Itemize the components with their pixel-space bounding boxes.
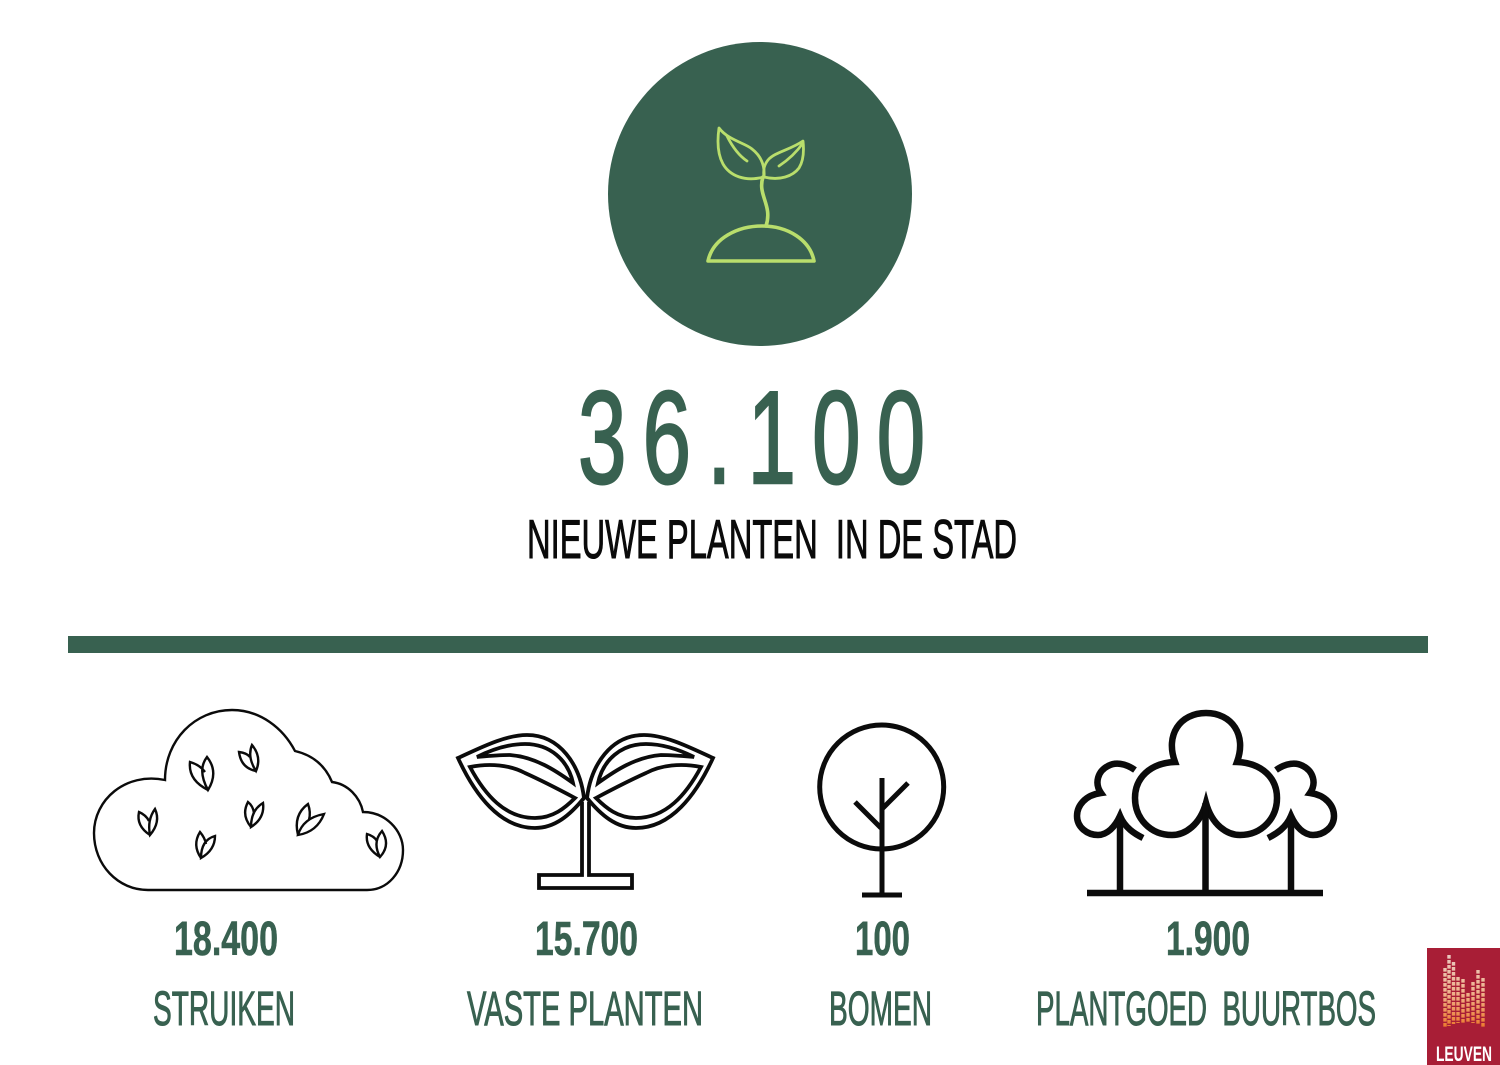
main number: 36.100 bbox=[578, 364, 925, 511]
item: bomen bbox=[820, 725, 944, 1036]
label: BOMEN bbox=[829, 983, 932, 1036]
icon: bush bbox=[94, 710, 403, 890]
icon: tree bbox=[820, 725, 944, 895]
value: 18.400 bbox=[174, 913, 278, 966]
label: STRUIKEN bbox=[153, 983, 295, 1036]
item: struiken bbox=[94, 710, 403, 1036]
logo background bbox=[1427, 948, 1500, 1065]
logo building mark bbox=[1445, 955, 1483, 1028]
item: plantgoed buurtbos bbox=[1036, 713, 1376, 1036]
logo: Leuven bbox=[1427, 948, 1500, 1065]
subtitle: NIEUWE PLANTEN IN DE STAD bbox=[527, 508, 1017, 570]
divider bar bbox=[68, 636, 1428, 653]
icon: three trees bbox=[1077, 713, 1334, 893]
header: seedling badge bbox=[608, 42, 912, 346]
item: vaste planten bbox=[458, 735, 713, 1036]
value: 15.700 bbox=[535, 913, 638, 966]
label: VASTE PLANTEN bbox=[467, 983, 703, 1036]
badge circle bbox=[608, 42, 912, 346]
value: 1.900 bbox=[1166, 913, 1250, 966]
value: 100 bbox=[855, 913, 910, 966]
icon: sprout bbox=[708, 128, 814, 261]
icon: seedling bbox=[458, 735, 713, 888]
